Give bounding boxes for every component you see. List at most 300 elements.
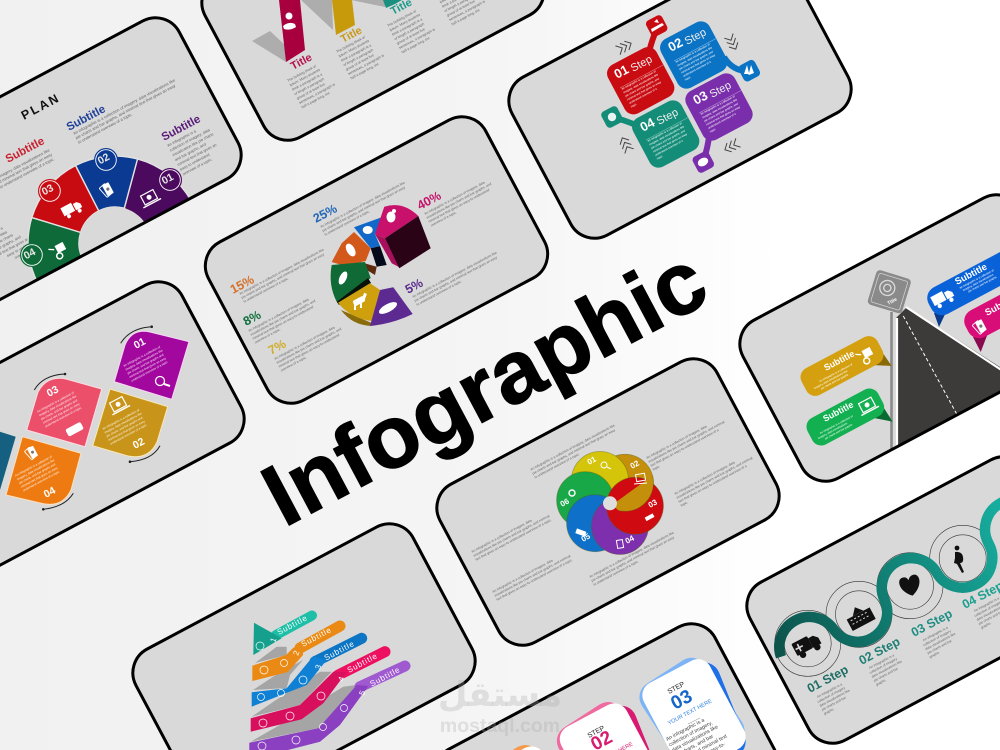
step 01: understand overview of a — [628, 87, 658, 105]
petal 01 yellow — [572, 452, 628, 508]
text column 2: half a page long, etc — [350, 62, 380, 80]
chevrons top left — [615, 39, 633, 55]
block 04 orange: imagery, data visualizations like — [16, 458, 55, 481]
bar shadows — [252, 0, 385, 62]
text bottom: pie charts and bar graphs, and minimal text that gives an easy — [591, 535, 675, 583]
ribbon 1 teal: Subtitle — [276, 613, 309, 637]
watermark — [438, 675, 562, 737]
icon: heart — [898, 574, 923, 598]
badge 03 — [38, 179, 62, 203]
step 04 text: graphs. — [980, 621, 992, 630]
subtitle blue text: to understand overview of a topic. — [77, 112, 133, 145]
panel contents — [252, 0, 488, 109]
icon: bird — [337, 270, 349, 286]
text 7%: visualizations like pie charts and bar graphs, and — [276, 327, 342, 365]
text 7%: overview of a topic. — [280, 355, 307, 373]
text 15%: to understand overview of a topic. — [243, 276, 289, 304]
step 01 text: graphs. — [823, 707, 835, 716]
step 02: An infographic is a collection of — [675, 42, 711, 64]
text right 1: text that gives an easy-to-understand overview of a — [650, 428, 719, 468]
step 02: pie charts and bar graphs, and — [678, 49, 714, 71]
panel: pyramid ribbons — [123, 514, 485, 750]
block 04 orange: understand overview of a topic — [22, 470, 60, 492]
label 7%: 7% — [266, 337, 288, 358]
icon: person — [283, 12, 296, 30]
block 03 pink: An infographic is a collection of — [36, 391, 75, 414]
bubble green: An infographic is a collection of — [819, 414, 854, 435]
block 01 purple: minimal text that gives an easy — [129, 356, 167, 379]
text column 2: ipsum. Many students — [338, 39, 370, 58]
text right 2: text that gives an easy-to-understand overview of a — [678, 464, 747, 504]
text top: pie charts and bar graphs, and minimal text that gives an easy — [532, 428, 616, 475]
icon: magnifier — [601, 462, 611, 469]
step 01 text: An infographic is a — [816, 682, 843, 699]
text right 2: topic. — [680, 500, 689, 508]
block 01 purple: understand overview of a topic — [130, 360, 169, 383]
arrows around blocks — [34, 326, 160, 510]
petal labels: 01 — [586, 454, 598, 467]
step 03 card: YOUR TEXT HERE — [667, 698, 713, 727]
dark block — [385, 216, 431, 268]
text column 4: half a page long, etc — [451, 8, 481, 26]
panel contents — [468, 652, 751, 750]
bar gold — [332, 0, 355, 35]
subtitle purple text: easy to understand — [179, 152, 210, 172]
title gold: Title — [339, 25, 364, 46]
icon: money — [99, 182, 114, 198]
block 03 pink: understand overview of a topic — [44, 406, 82, 428]
subtitle red text: to understand overview of a topic. — [0, 156, 55, 189]
sector 40% pink — [375, 205, 418, 238]
panel: timeline wave — [737, 447, 1000, 750]
step 03: pie charts and bar graphs, and — [703, 101, 739, 123]
step 01 card — [468, 739, 584, 750]
icon: handshake — [645, 513, 654, 521]
bubble green: Subtitle — [821, 399, 855, 424]
text right 1: An infographic is a collection of imagery, data — [646, 424, 708, 460]
step 01 text: collection of imagery — [817, 686, 846, 704]
step 03 text: collection of imagery — [922, 629, 952, 647]
bubble gold: pie charts and bar graphs. — [820, 372, 850, 390]
subtitle purple text: visualization like pie charts — [171, 131, 214, 157]
bubble gold: imagery, data visualizations like — [813, 369, 849, 390]
text column 3: think a paragraph is a — [391, 17, 423, 37]
orange inner wall — [360, 262, 377, 275]
bubble blue: An infographic is a collection of — [959, 268, 995, 290]
text bottom: to understand overview of a topic. — [593, 559, 639, 587]
ribbon 5 purple: 5 — [357, 689, 368, 697]
icon: truck — [60, 202, 82, 218]
ribbon 1 teal — [253, 613, 312, 655]
centre hole — [603, 496, 617, 510]
icon: hand truck — [48, 242, 66, 260]
text column 2: of length a paragraph — [343, 48, 374, 67]
step 02 card — [551, 696, 667, 750]
text right 2: visualizations like pie charts and bar graphs, and minimal — [676, 456, 753, 500]
step 01 heading: 01 Step — [805, 662, 851, 696]
block 02 gold — [93, 389, 168, 457]
bubble blue: imagery, data visualizations — [962, 272, 995, 292]
step 02: understand overview of a — [682, 60, 712, 78]
title: Infographic — [246, 229, 722, 545]
panel background — [427, 349, 789, 655]
panel: cycle steps — [0, 272, 254, 578]
block 03 pink: 03 — [45, 383, 61, 400]
panel contents — [249, 613, 405, 750]
sector 01 purple — [124, 159, 191, 226]
icon: mouse — [363, 226, 373, 234]
step 02 — [657, 18, 761, 92]
text 25%: pie charts and bar graphs, and minimal text that gives an easy — [322, 185, 406, 233]
badge 01: 01 — [160, 171, 176, 187]
step 01: pie charts and bar graphs, and — [624, 76, 660, 98]
ribbon 5 purple: Subtitle — [368, 665, 402, 688]
text column 2: sentences, a paragraph is — [347, 53, 385, 76]
road edges — [897, 307, 1000, 470]
block 02 gold: understand overview of a topic — [109, 423, 148, 446]
bubble blue — [923, 241, 1000, 327]
text left 2: text that gives an easy-to-understand overview of a topic. — [496, 558, 573, 602]
dashed rings — [775, 525, 996, 676]
bubble blue: Subtitle — [953, 262, 989, 288]
panel: four steps — [499, 0, 861, 248]
block 01 purple: imagery, data visualizations like — [125, 348, 164, 372]
purple lower fill — [146, 201, 195, 250]
ribbon 3 blue: 3 — [313, 663, 324, 671]
step 04: pie charts and bar graphs, and — [650, 128, 686, 150]
pink wall — [375, 234, 399, 267]
text column 3: The building block of — [387, 9, 417, 28]
block 03 pink: imagery, data visualizations like — [38, 394, 77, 417]
step 02 text: pie charts and bar — [873, 666, 900, 683]
step 02 text: data visualizations like — [871, 659, 903, 679]
step 01 text: data visualizations like — [819, 688, 851, 708]
text 8%: overview of a topic. — [254, 327, 281, 345]
text 8%: visualizations like pie charts and bar graphs, and — [250, 299, 316, 337]
panel contents — [775, 500, 1000, 716]
step 01: An infographic is a collection of — [621, 69, 657, 91]
badge 03: 03 — [40, 182, 56, 198]
ribbon 3 blue: Subtitle — [323, 639, 356, 662]
subtitle purple text: and bar graphs, and — [174, 141, 207, 162]
step 03: minimal text that gives an easy — [705, 105, 741, 126]
sign post — [890, 312, 893, 470]
panel background — [192, 0, 554, 150]
text column 2: think a paragraph is a — [340, 43, 372, 63]
step 03: 03 — [690, 88, 710, 108]
panel: flower cycle — [427, 349, 789, 655]
step 03: topic. — [709, 127, 717, 134]
panel: step cards — [425, 614, 787, 750]
step 01 — [604, 14, 678, 118]
step 02: imagery, data visualizations like — [676, 45, 713, 67]
text column 1: ipsum. Many students — [289, 68, 321, 87]
sign — [867, 269, 912, 314]
text column 3: half a page long, etc — [401, 36, 431, 54]
sector 04 green — [28, 218, 83, 284]
step 03 text: data visualizations like — [925, 632, 956, 651]
text column 2: The building block of — [336, 35, 366, 54]
text left 2: visualizations like pie charts and bar graphs, and minimal — [494, 554, 571, 598]
text 7%: An infographic is a collection of imagery, data — [274, 325, 336, 361]
watermark arabic: مستقل — [438, 675, 562, 715]
petal labels: 06 — [559, 496, 571, 509]
ribbon 4 pink: 4 — [336, 675, 347, 683]
block 04 orange: minimal text that gives an easy — [20, 466, 59, 489]
icon: truck small — [575, 528, 586, 537]
block 03 pink: minimal text that gives an easy — [42, 402, 81, 425]
step 03 text: graphs. — [929, 650, 941, 659]
pie chart — [331, 205, 431, 326]
step 02: Step — [683, 26, 708, 48]
block 02 gold: An infographic is a collection of — [102, 408, 140, 431]
bubble pink — [960, 269, 1000, 352]
panel background — [196, 107, 557, 413]
text column 1: group of at least five — [296, 82, 326, 101]
badge 02: 02 — [96, 151, 112, 167]
text 40%: minimal text that gives an easy-to-understand — [428, 188, 490, 224]
text right 2: An infographic is a collection of imagery, data — [674, 460, 736, 496]
text 40%: overview of a topic. — [430, 210, 457, 228]
block 02 gold: pie charts, and bar graphs and — [106, 416, 144, 438]
step 01: Step — [629, 53, 654, 75]
chevrons bottom right — [723, 138, 741, 154]
bubble green — [803, 385, 893, 449]
icon: laptop small — [634, 473, 647, 484]
step 03 card: An infographic is a — [665, 717, 706, 743]
text left 1: An infographic is a collection of imagery, data — [471, 518, 533, 554]
step 02: 02 — [665, 35, 685, 55]
step 04: Step — [655, 106, 680, 128]
step 02: minimal text that gives an easy — [680, 53, 716, 74]
panel: 3d bars — [192, 0, 554, 150]
block 01 purple: pie charts, and bar graphs and — [127, 353, 165, 375]
petal 04 purple — [592, 498, 648, 554]
petal 06 green — [557, 472, 614, 529]
text column 1: The building block of — [287, 64, 317, 83]
label 8%: 8% — [241, 308, 263, 329]
step 02 heading: 02 Step — [857, 634, 903, 668]
panel: road — [730, 185, 1000, 520]
block 04 orange: 04 — [42, 484, 58, 501]
step 02 text: collection of imagery — [869, 657, 898, 675]
step 04: 04 — [637, 114, 658, 135]
text left 1: text that gives an easy-to-understand overview of a topic. — [475, 518, 552, 562]
heading: plan: PLAN — [19, 91, 63, 123]
chevrons bottom left — [618, 136, 634, 154]
text 7%: minimal text that gives an easy-to-understand — [278, 333, 340, 369]
step 01: imagery, data visualizations like — [622, 72, 659, 94]
text top: to understand overview of a topic. — [534, 452, 580, 479]
step 04: minimal text that gives an easy — [652, 132, 688, 153]
badge 04: 04 — [22, 246, 38, 262]
text column 1: sentences, a paragraph is — [298, 82, 336, 105]
icon: horse — [352, 293, 367, 310]
panel: plan half donut — [0, 8, 251, 314]
step 04: topic. — [656, 154, 664, 161]
panel background — [0, 272, 254, 578]
sector 7% gold — [338, 283, 380, 321]
label 5%: 5% — [403, 276, 425, 297]
block 02 gold: 02 — [131, 435, 147, 452]
text 15%: An infographic is a collection of imagery, data visualizations like — [239, 248, 325, 296]
sector 03 red — [32, 166, 99, 232]
shadows — [251, 647, 357, 742]
bubble gold: Subtitle — [822, 348, 856, 373]
petal labels: 03 — [647, 497, 659, 510]
inner hole — [80, 207, 144, 254]
block 01 purple: 01 — [132, 335, 148, 352]
text 40%: visualizations like pie charts and bar graphs, and — [426, 182, 492, 220]
step 02: topic. — [684, 75, 692, 82]
petal labels: 05 — [580, 531, 592, 544]
subtitle purple text: collection of imagery, data — [169, 127, 211, 153]
step 04: An infographic is a collection of — [647, 121, 683, 143]
block 01 purple: An infographic is a collection of — [123, 345, 161, 368]
subtitle blue text: An infographic is a collection of imagery, data visualizations like — [72, 77, 177, 136]
step 02 card: STEP — [587, 725, 606, 740]
step 04 text: An infographic is a — [973, 596, 1000, 613]
ribbon 2 orange — [252, 625, 340, 681]
text column 3: sentences, a paragraph is — [398, 27, 436, 50]
text column 3: group of at least five — [396, 27, 426, 46]
icon: rooster — [386, 209, 396, 222]
step 01 text: pie charts and bar — [821, 695, 848, 712]
text 8%: An infographic is a collection of imagery, data — [248, 297, 310, 333]
subtitle red: Subtitle — [4, 135, 47, 166]
step 01: minimal text that gives an easy — [626, 80, 662, 101]
sector 5% purple — [370, 287, 413, 326]
step 01: 01 — [611, 62, 631, 82]
text column 4: sentences, a paragraph is — [448, 0, 486, 22]
text top: An infographic is a collection of imagery, data visualizations like — [530, 423, 616, 472]
step 03 text: pie charts and bar — [927, 638, 953, 655]
badge 04 — [20, 243, 44, 267]
step 03 card — [633, 652, 751, 750]
icon: money small — [616, 540, 624, 548]
half donut chart — [28, 156, 191, 284]
ribbon 2 orange: Subtitle — [300, 625, 333, 649]
step 01: topic. — [630, 102, 638, 109]
bar teal — [383, 0, 402, 8]
step 03: understand overview of a — [707, 112, 737, 130]
block 02 gold: imagery, data visualizations like — [104, 411, 143, 435]
text right 1: topic. — [652, 464, 661, 472]
sign: Title — [886, 297, 898, 307]
text 8%: minimal text that gives an easy-to-understand — [252, 305, 314, 341]
subtitle blue text: pie charts and bar graphs, and minimal text that gives an easy — [74, 83, 177, 140]
step 04: understand overview of a — [654, 139, 684, 157]
block 01 purple — [114, 331, 189, 399]
panel contents — [0, 326, 189, 510]
panel contents — [797, 241, 1000, 520]
panel background — [0, 8, 251, 314]
block 04 orange: pie charts, and bar graphs and — [18, 462, 56, 485]
text right 1: visualizations like pie charts and bar graphs, and minimal — [648, 420, 725, 464]
text column 3: ipsum. Many students — [389, 13, 421, 32]
icon: shrimp — [344, 242, 358, 258]
petal 03 red — [606, 477, 663, 534]
ribbon 4 pink: Subtitle — [346, 651, 379, 675]
step 03 heading: 03 Step — [909, 606, 955, 640]
block 03 pink — [27, 378, 102, 447]
title crimson: Title — [289, 52, 314, 73]
badge 02 — [94, 148, 118, 172]
text 25%: An infographic is a collection of imagery, data visualizations like — [320, 181, 406, 229]
sector 25% blue — [354, 217, 382, 248]
petal labels — [559, 454, 659, 548]
block 02 gold: minimal text that gives an easy — [108, 419, 146, 442]
bar crimson — [279, 0, 305, 62]
step 03 — [682, 70, 756, 174]
step 03: An infographic is a collection of — [700, 94, 736, 116]
ribbon 2 orange: 2 — [291, 649, 302, 657]
icon: fish — [377, 300, 399, 316]
dark inner blue wall — [371, 246, 387, 267]
step 03 card: 03 — [667, 686, 696, 714]
petal 05 blue — [567, 495, 624, 552]
road centre line — [903, 316, 960, 420]
subtitle green text: easy to understand — [6, 238, 37, 258]
subtitle purple: Subtitle — [160, 113, 203, 144]
block 04 orange: An infographic is a collection of — [14, 455, 53, 478]
subtitle purple text: An infographic is a — [166, 128, 197, 148]
badge 01 — [158, 168, 182, 192]
panel background — [425, 614, 787, 750]
icon: laptop — [138, 188, 161, 208]
text column 1: think a paragraph is a — [291, 72, 323, 92]
panel: 3d pie chart — [196, 107, 557, 413]
green dark band — [337, 278, 371, 305]
text 5%: pie charts and bar graphs, and minimal text that gives an easy — [414, 255, 498, 303]
step 04: imagery, data visualizations like — [648, 124, 685, 146]
subtitle purple text: minimal text that gives an — [176, 142, 217, 167]
text 25%: to understand overview of a topic. — [324, 209, 370, 237]
panel background — [730, 185, 1000, 491]
bubble gold — [797, 333, 892, 399]
icon: ambulance — [791, 632, 824, 660]
step 03: Step — [708, 79, 733, 101]
sector 15% orange — [332, 232, 371, 266]
block 05 teal — [0, 432, 16, 490]
bubble green: pie charts and bar graphs. — [824, 422, 854, 440]
panel background — [123, 514, 485, 750]
text left 2: An infographic is a collection of imagery, data — [492, 558, 554, 594]
bubble gold: An infographic is a collection of — [818, 362, 853, 383]
subtitle blue: Subtitle — [65, 103, 108, 134]
icon: pregnant person — [954, 546, 964, 573]
label 25%: 25% — [311, 202, 340, 226]
watermark latin: mostaql.com — [440, 715, 560, 737]
step 03 card: STEP — [667, 681, 686, 696]
petal labels: 04 — [624, 533, 636, 546]
subtitle purple text: overview of a topic. — [181, 156, 213, 176]
text column 2: group of at least five — [345, 53, 375, 72]
icon: ring — [569, 490, 575, 496]
text column 1: of length a paragraph — [294, 77, 325, 96]
text 5%: An infographic is a collection of imagery, data visualizations like — [412, 251, 498, 299]
block 03 pink: pie charts, and bar graphs and — [40, 398, 78, 421]
text column 3: of length a paragraph — [394, 22, 425, 41]
chevrons top right — [724, 33, 740, 51]
step 03: imagery, data visualizations like — [701, 97, 738, 119]
text 5%: to understand overview of a topic. — [416, 279, 462, 307]
step 04 — [600, 97, 703, 171]
ribbon 5 purple — [249, 665, 405, 750]
petal labels: 02 — [629, 458, 641, 471]
panel background — [737, 447, 1000, 750]
flower diagram — [557, 452, 663, 554]
